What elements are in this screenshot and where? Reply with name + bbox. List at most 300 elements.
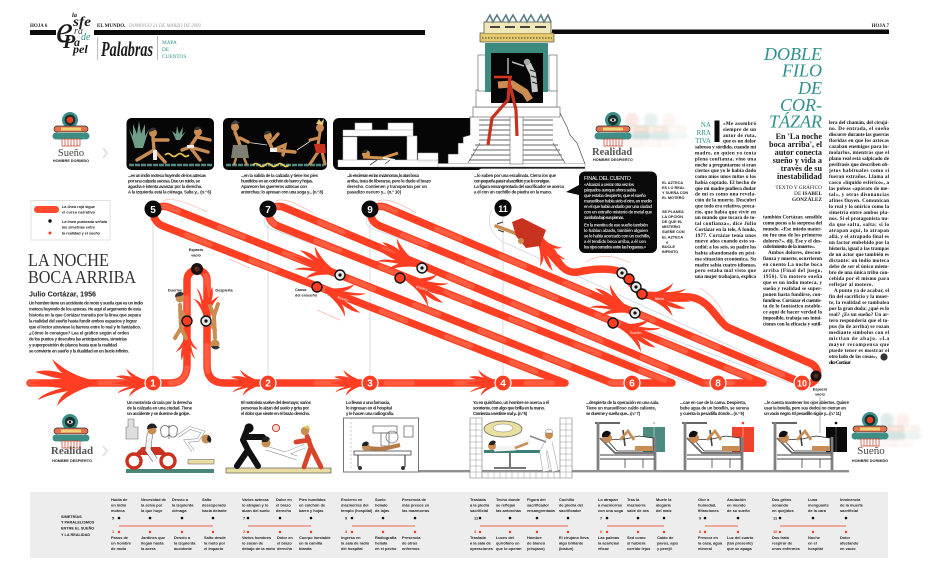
captions for the dream panels: agacha e intenta avanzar por la derecha. bbox=[128, 184, 202, 189]
article text column 3: dictante: un indio moteca bbox=[829, 258, 889, 264]
symmetry group 11 and 4: a la piedra bbox=[470, 502, 490, 508]
callout: final del cuento: a él tendido boca arriba, a él con bbox=[584, 239, 646, 244]
symmetry group 11 and 4: que lo operan bbox=[496, 546, 522, 551]
captions for the dream panels: a él con un cuchillo de piedra en la mano. bbox=[474, 190, 552, 194]
symmetry group 5 and 1: Necesidad de bbox=[141, 497, 167, 502]
dream sequence number markers: 7 bbox=[265, 205, 271, 216]
symmetry group 5 and 1: Pasos de bbox=[111, 535, 129, 540]
symmetry group 11 and 4: algo brillante bbox=[559, 540, 584, 546]
symmetry group 5 and 1: Desvío a bbox=[172, 497, 189, 502]
sidebar note: bucle infinito: EL AZTECA bbox=[662, 181, 683, 185]
panel 3: prison, black scene bbox=[333, 118, 483, 170]
symmetry group 5 and 1: un indio bbox=[111, 502, 127, 508]
symmetry group 7 and 6: Sed como bbox=[627, 535, 646, 540]
article text column 3: cazaban enemigos para in- bbox=[829, 144, 889, 150]
captions for the reality scenes: Un motorista circula por la derecha bbox=[127, 400, 193, 405]
symmetry band label: Y PARALELISMOS bbox=[61, 521, 95, 525]
article subheading: En 'La noche bbox=[776, 132, 822, 141]
article drop label: narrativa: NA bbox=[701, 121, 711, 129]
symmetry group 5 and 1: un hombre bbox=[111, 540, 132, 546]
captions for the reality scenes: lo ingresan en el hospital bbox=[346, 406, 392, 411]
symmetry group 5 and 1: moteca bbox=[111, 508, 125, 513]
labels on flames bbox=[337, 285, 665, 335]
article text column 1: como míos unos mitos o los bbox=[695, 174, 756, 180]
article text column 2: no fue uno de los primeros bbox=[763, 232, 822, 238]
callout: final del cuento: FINAL DEL CUENTO bbox=[584, 176, 631, 182]
emblem: sueno, sleeping man with ghost echoes: HOMBRE DORMIDO bbox=[852, 459, 888, 463]
intro text: se convierte en sueño y la dualidad en un bucle infinito. bbox=[29, 348, 129, 354]
symmetry group 11 and 4: Traslada bbox=[470, 497, 487, 502]
numbers on reality markers: 1 bbox=[150, 379, 156, 390]
symmetry group 7 and 6: mazmorra bbox=[627, 502, 646, 508]
symmetry group 7 and 2: barro y hojas bbox=[299, 508, 323, 513]
symmetry group 7 and 6: la acarician bbox=[598, 540, 620, 546]
sleeper figures on loop: duerme, despierta bbox=[175, 292, 220, 349]
symmetry group 9 and 3: la sala de radio bbox=[341, 540, 370, 546]
article text column 1: había abandonado en pési- bbox=[695, 250, 756, 256]
symmetry group 9 and 8: de su sueño bbox=[727, 508, 750, 513]
article text column 1: tal confianza», dice Julio bbox=[695, 221, 756, 227]
emblem: realidad, awake man with ghost echoes: Realidad bbox=[592, 147, 632, 158]
symmetry group 11 and 10: Luna bbox=[808, 497, 818, 502]
sidebar note: bucle infinito: BUCLE bbox=[662, 245, 676, 249]
article text column 3: discurre durante las guerras bbox=[829, 132, 889, 138]
captions for the dream panels: arriba, trata de liberarse, pero le duele el brazo bbox=[347, 178, 431, 184]
article byline: DE ISABEL bbox=[794, 191, 822, 197]
symmetry band label: ENTRE EL SUEÑO bbox=[61, 526, 94, 530]
article text column 3: real? ¿Es un sueño? Un ar- bbox=[829, 312, 889, 318]
article text column 2: mundo. «Ese miedo mater- bbox=[763, 226, 822, 232]
legend: el curso narrativo bbox=[62, 210, 96, 214]
sidebar note: bucle infinito: LA OPCIÓN bbox=[662, 214, 683, 219]
symmetry group 11 and 10: afectando bbox=[840, 540, 859, 546]
emblem: realidad, awake man: Realidad bbox=[51, 445, 93, 457]
article text column 1: que todo era relativo, preca- bbox=[695, 203, 756, 209]
symmetry group 11 and 4: 11 bbox=[474, 516, 479, 520]
article drop label: narrativa: TIVA bbox=[695, 137, 711, 145]
symmetry group 11 and 10: sacrificial bbox=[840, 508, 858, 513]
article text column 1: pero estaba mal visto que bbox=[695, 268, 757, 274]
node labels bbox=[168, 248, 828, 396]
article text column 1: Cortázar en la tele, A fondo, bbox=[695, 227, 757, 233]
reality sequence number markers bbox=[145, 375, 810, 391]
symmetry group 11 and 4: (bisturí) bbox=[559, 546, 574, 551]
numbers on reality markers bbox=[150, 379, 807, 390]
sidebar note: bucle infinito: INFINITO bbox=[662, 250, 678, 254]
intro text: y superposición de planos hasta que la realidad bbox=[29, 342, 117, 348]
article text column 3: otro lado de las cosas», bbox=[829, 354, 878, 360]
article text column 1: que mi madre pudiera dudar bbox=[695, 186, 757, 192]
symmetry group 11 and 4: Cuchillo bbox=[559, 497, 575, 502]
symmetry group 9 and 3: las mazmorras bbox=[402, 508, 429, 513]
symmetry group 11 and 4 bbox=[470, 497, 589, 551]
article heading: DE bbox=[797, 78, 822, 98]
captions for the reality scenes: Ya en quirófano, un hombre se acerca a él bbox=[473, 400, 549, 405]
symmetry group 5 and 1: hacia delante bbox=[202, 508, 227, 513]
captions for the reality scenes: El motorista vuelve del desmayo; varios bbox=[241, 400, 312, 405]
article text column 2: Ambos dolores, descon- bbox=[768, 250, 822, 256]
article heading: TÁZAR bbox=[769, 110, 822, 132]
symmetry group 11 and 4: se reflejan bbox=[496, 502, 516, 508]
symmetry group 11 and 4: de piedra del bbox=[559, 502, 583, 508]
intro text: Un hombre tiene un accidente de moto y sueña que es un indio bbox=[29, 300, 143, 306]
numbers on reality markers: 4 bbox=[500, 379, 506, 390]
node labels: Despierta bbox=[215, 288, 234, 292]
symmetry group 11 and 4: Figura del bbox=[527, 497, 546, 502]
symmetry group 7 and 6: Tras la bbox=[627, 497, 640, 502]
symmetry group 9 and 3: Encierro en bbox=[341, 497, 363, 502]
symmetry group 5 and 1: accidente bbox=[174, 546, 193, 551]
logo: la esfera de papel: P bbox=[62, 31, 76, 53]
captions for the reality scenes: usar la botella, pero sus dedos no cierran en bbox=[764, 406, 846, 411]
captions for the reality scenes: personas lo alzan del suelo y grita por bbox=[241, 406, 309, 411]
node labels: vacío bbox=[191, 254, 202, 258]
captions for the reality scenes: Lo llevan a una farmacia, bbox=[346, 400, 390, 405]
intro text bbox=[29, 300, 143, 354]
legend bbox=[31, 200, 110, 240]
symmetry group 9 and 3: más presos en bbox=[402, 502, 430, 508]
symmetry group 7 and 6: del matz bbox=[656, 508, 672, 513]
symmetry group 11 and 10: 11 bbox=[773, 516, 778, 520]
symmetry group 11 and 10: en quejidos bbox=[772, 508, 794, 513]
symmetry band background bbox=[30, 492, 888, 558]
symmetry group 7 and 6: Las palmas bbox=[598, 535, 619, 540]
symmetry group 11 and 4: Hombre bbox=[527, 535, 543, 540]
article text column 3: mediante símbolos con el bbox=[829, 330, 890, 336]
callout: final del cuento: se le había acercado con un cuchillo, bbox=[584, 234, 650, 238]
callout: final del cuento bbox=[566, 172, 657, 253]
article text column 3: perífrasis que describen ob- bbox=[829, 162, 889, 168]
article text column 3: puede tener es mostrar el bbox=[829, 348, 890, 354]
article text column 3: no. De entrada, el sueño bbox=[829, 126, 889, 132]
article text column 3: fin del sacrificio y la muer- bbox=[829, 294, 889, 300]
article text column 3: historia, igual a las trampas bbox=[829, 246, 889, 252]
article text column 3: bro de una única tribu con- bbox=[829, 270, 889, 276]
symmetry group 11 and 10 bbox=[772, 497, 864, 551]
symmetry group 9 and 8: Anulación bbox=[727, 497, 746, 502]
captions for the dream panels: con pequeña para ir al sacrificio y se le consigue. bbox=[474, 178, 550, 184]
article byline bbox=[775, 183, 822, 203]
article text column 3: molarlos, mientras que el bbox=[829, 150, 890, 156]
symmetry group 11 and 4: sacrificial bbox=[470, 508, 488, 513]
symmetry group 11 and 4: Traslada bbox=[470, 535, 487, 540]
section header: palabras, mapa de cuentos: CUENTOS bbox=[162, 54, 186, 60]
emblem: sueno, sleeping man: HOMBRE DORMIDO bbox=[53, 159, 89, 163]
article text column 2: como pocos a la sorpresa del bbox=[763, 220, 823, 226]
article text column 2: ponen hasta fundirse, con- bbox=[763, 292, 822, 298]
article text column 3: las poleas «aparato de me- bbox=[829, 186, 889, 192]
captions for the dream panels bbox=[128, 173, 565, 194]
symmetry group 11 and 4: 4 bbox=[474, 529, 477, 534]
symmetry group 7 and 2: el brazo bbox=[277, 540, 292, 546]
symmetry group 9 and 3: de otros bbox=[402, 540, 417, 546]
symmetry group 9 and 8: filtraciones bbox=[698, 508, 719, 513]
symmetry group 9 and 3: 3 bbox=[345, 529, 348, 534]
sidebar note: bucle infinito: Y SUEÑA CON bbox=[662, 190, 688, 195]
main title: BOCA ARRIBA bbox=[28, 267, 136, 287]
captions for the reality scenes: ...le cuesta mantener los ojos abiertos. Quiere bbox=[764, 400, 850, 405]
logo: la esfera de papel bbox=[56, 9, 94, 56]
labels on flames: Piedra bbox=[416, 285, 429, 292]
legend: la realidad y el sueño bbox=[62, 232, 101, 236]
emblem: realidad, awake man with ghost echoes bbox=[592, 112, 688, 162]
article text column 3: afines fluyen. Comunican bbox=[829, 198, 889, 204]
captions for the reality scenes: Comienza a sentirse mal y... (n.º 5) bbox=[473, 411, 528, 416]
article text column 3: de un actor que también es bbox=[829, 252, 889, 258]
symmetry group 9 and 3: Ingresa en bbox=[341, 535, 361, 540]
symmetry group 7 and 2: el brazo bbox=[276, 502, 291, 508]
article text column 2: ciones con la eficacia y sutil- bbox=[763, 322, 822, 328]
sidebar note: bucle infinito: ES LO REAL bbox=[662, 186, 685, 190]
dream sequence number markers: 9 bbox=[367, 205, 373, 216]
symmetry group 9 and 3: en el pecho bbox=[375, 546, 397, 551]
logo: la esfera de papel: la bbox=[72, 12, 78, 19]
captions for the reality scenes: un vacío negro. El pesadillo sigue y... (n.º 11) bbox=[764, 411, 842, 416]
callout: final del cuento: con un extraño misterio de metal que bbox=[584, 210, 653, 214]
header: left page bar: HOJA 6 bbox=[30, 24, 48, 29]
captions for the reality scenes: ...cae en cae de la cama. Despierta, bbox=[680, 400, 746, 405]
article text column 1: plena confianza, vino una bbox=[695, 156, 756, 162]
article text column 1: ma situación económica. Su bbox=[695, 256, 756, 262]
article heading bbox=[763, 44, 822, 132]
symmetry group 7 and 2: 2 bbox=[243, 529, 246, 534]
symmetry group 5 and 1: la acera bbox=[141, 546, 156, 551]
symmetry group 11 and 4: El cirujano lleva bbox=[559, 535, 589, 540]
article text column 2: fundirse. Cortázar el cuentis- bbox=[763, 298, 822, 304]
symmetry group 11 and 4: de blanco bbox=[527, 540, 546, 546]
article text column 3: A punto ya de acabar, el bbox=[834, 288, 890, 294]
captions for the dream panels: ...en la salida de la calzada y tiene los pies bbox=[241, 173, 319, 178]
article text column 3: tero respondería que el to- bbox=[829, 318, 889, 324]
article text column 1: ciertos que yo le había dado bbox=[695, 168, 756, 174]
logo: la esfera de papel: sfe bbox=[72, 15, 91, 30]
symmetry group 9 and 3: de lajas bbox=[375, 508, 389, 513]
scene 4: operating room bbox=[470, 418, 572, 478]
captions for the reality scenes: y le hacen una radiografía. bbox=[346, 411, 394, 416]
callout: final del cuento: zumbaba bajo sus piernas. bbox=[584, 215, 624, 220]
article text column 1: un mundo que tocara de to- bbox=[695, 215, 756, 221]
logo: la esfera de papel: pel bbox=[72, 42, 88, 56]
symmetry group 9 and 3: del hospital bbox=[341, 546, 363, 551]
article text column 1: de mí es como una revela- bbox=[695, 192, 756, 198]
symmetry group 11 and 4: sacrificador bbox=[559, 508, 582, 513]
captions for the dream panels: ...lo encierran en las mazmorras, lo atan boca bbox=[347, 173, 420, 178]
symmetry group 5 and 1: llegan hasta bbox=[141, 540, 164, 546]
symmetry group 9 and 3: Presencia de bbox=[402, 497, 427, 502]
section header: palabras, mapa de cuentos: DE bbox=[162, 47, 169, 53]
symmetry group 9 and 8: Frescor en bbox=[698, 535, 719, 540]
symmetry group 11 and 10: sonando bbox=[772, 502, 789, 508]
symmetry group 5 and 1 bbox=[111, 497, 227, 551]
symmetry group 9 and 3: Radiografía bbox=[375, 535, 397, 540]
article text column 1: nueve años cuando esto su- bbox=[695, 239, 756, 245]
emblem: realidad, awake man: HOMBRE DESPIERTO bbox=[52, 459, 92, 463]
sidebar note: bucle infinito: EL AZTECA bbox=[662, 236, 683, 240]
symmetry group 7 and 6: sabe de ora bbox=[627, 508, 649, 513]
symmetry group 7 and 6: 7 bbox=[600, 516, 602, 520]
labels on flames: Sueño bbox=[337, 295, 350, 303]
article text column 3: floridas en que los aztecas bbox=[829, 138, 889, 144]
article text column 2: dolores?». dij. Ése y el des- bbox=[763, 236, 822, 244]
scene 1: motorcycle accident bbox=[126, 419, 214, 473]
article text column 3: cebida por él mismo para bbox=[829, 276, 889, 282]
illustration: temple pyramid with sacrifice bbox=[335, 15, 585, 169]
callout: final del cuento: En la mentira de ese sueño también bbox=[584, 222, 648, 228]
article text column 1: rio, que había que vivir en bbox=[695, 209, 756, 215]
symmetry group 7 and 2: en la camilla bbox=[299, 540, 323, 546]
article text column 1: ción de la muerte. Descubrí bbox=[695, 198, 757, 204]
author line: Julio Cortázar, 1956 bbox=[29, 290, 96, 298]
article text column 2: arriba (Final del juego, bbox=[763, 267, 823, 274]
symmetry group 11 and 10: Dolor bbox=[840, 535, 851, 540]
symmetry group 11 and 4: operaciones bbox=[470, 546, 493, 551]
symmetry group 7 and 2: derecho bbox=[277, 546, 293, 551]
symmetry group 11 and 10: en vacío bbox=[840, 546, 856, 551]
article text column 1: 1977. Cortázar tenía unos bbox=[695, 233, 756, 239]
symmetry group 7 and 6: Caldo de bbox=[657, 535, 674, 540]
symmetry group 5 and 1: 1 bbox=[112, 529, 115, 534]
symmetry group 5 and 1: ciénaga bbox=[172, 508, 187, 513]
symmetry group 11 and 10: Inminencia bbox=[840, 497, 861, 502]
article text column 2: que es un indio moteca, y bbox=[763, 280, 822, 286]
symmetry group 7 and 6: alegaría bbox=[656, 502, 672, 508]
article text column 1: madre, en quien yo tenía bbox=[695, 150, 756, 156]
article byline: TEXTO Y GRÁFICO bbox=[775, 183, 822, 191]
logo: la esfera de papel: e bbox=[56, 9, 73, 51]
symmetry group 7 and 2: derecho bbox=[276, 508, 292, 513]
symmetry band label bbox=[61, 514, 95, 537]
callout: final del cuento: en el que había andado por una ciudad bbox=[584, 204, 652, 209]
symmetry group 7 and 2: 7 bbox=[243, 516, 245, 520]
sidebar note: bucle infinito: o bbox=[666, 240, 669, 244]
symmetry group 11 and 10: menguante bbox=[808, 502, 830, 508]
article subheading: inestabilidad bbox=[777, 172, 822, 181]
symmetry group 7 and 2: lo atrapan y lo bbox=[242, 502, 269, 508]
symmetry group 5 and 1: Huída de bbox=[111, 497, 128, 502]
symmetry group 9 and 8: 8 bbox=[699, 529, 702, 534]
dream sequence number markers: 11 bbox=[498, 204, 508, 214]
symmetry group 7 and 6: pavos, ajos bbox=[657, 540, 678, 546]
emblem: sueno, sleeping man with ghost echoes bbox=[852, 412, 922, 463]
emblem: realidad, awake man bbox=[51, 414, 107, 463]
symmetry group 5 and 1: la selva por bbox=[141, 502, 163, 508]
symmetry group 11 and 4: las antorchas bbox=[496, 508, 521, 513]
article text column 3: dice Cortázar bbox=[829, 360, 852, 366]
scene 8: hospital bed with red door bbox=[682, 422, 754, 470]
article text column 1 bbox=[695, 121, 757, 280]
symmetry group 11 and 10: Dos trata bbox=[772, 535, 790, 540]
node labels: Causa bbox=[295, 288, 307, 292]
panel 1: fleeing through the jungle bbox=[126, 118, 214, 170]
article text column 1: sabroso y sórdido, cuando mi bbox=[695, 145, 757, 151]
article heading: FILO bbox=[781, 60, 822, 80]
captions for the dream panels: ...lo suben por una escalinata. Cierra los que bbox=[474, 173, 557, 178]
symmetry group 11 and 10: Dos gritos bbox=[772, 497, 791, 502]
section header: palabras, mapa de cuentos: MAPA bbox=[162, 40, 177, 46]
sidebar note: bucle infinito: SE PLANEA bbox=[662, 210, 684, 214]
symmetry group 9 and 8 bbox=[698, 497, 754, 551]
article text column 2: ce aquí de hacer verdad lo bbox=[763, 310, 822, 316]
callout: final del cuento: párpados aunque ahora sabía bbox=[584, 188, 637, 192]
symmetry group 7 and 2: lo sacan de bbox=[242, 540, 264, 546]
symmetry group 9 and 8: (tan presente) bbox=[727, 540, 753, 546]
numbers on reality markers: 3 bbox=[367, 379, 373, 390]
article text column 3: reflejar al motero. bbox=[829, 282, 874, 288]
captions for the reality scenes: un accidente y se duerme de golpe. bbox=[127, 411, 190, 416]
article heading: DOBLE bbox=[763, 44, 822, 64]
symmetry group 5 and 1: de moto bbox=[111, 546, 127, 551]
symmetry group 11 and 10: de la muerte bbox=[840, 502, 864, 508]
article text column 3: atrapan aquí, lo atrapan bbox=[829, 228, 889, 234]
logo: la esfera de papel: de bbox=[81, 32, 91, 43]
callout: final del cuento: que estaba despierto, que el sueño bbox=[584, 193, 646, 198]
header: left page bar: DOMINGO 21 DE MARZO DE 2009 bbox=[128, 24, 201, 29]
logo: la esfera de papel: ra bbox=[74, 26, 83, 37]
article text column 3: plano real está salpicado de bbox=[829, 156, 890, 162]
article text column 2: fianza y muerte, ocurrieron bbox=[763, 256, 822, 262]
emblem: sueno, sleeping man bbox=[52, 112, 107, 163]
article text column 2: cubrimiento de la muerte». bbox=[763, 244, 816, 250]
article subheading: través de su bbox=[781, 164, 822, 173]
node labels: Duerme bbox=[168, 288, 182, 292]
intro text: de los puntos y descubra las anticipaciones, simetrías bbox=[29, 336, 128, 342]
intro text: que el lector atraviese la barrera entre lo real y lo fantástico. bbox=[29, 324, 141, 330]
symmetry group 9 and 8: 9 bbox=[699, 516, 702, 520]
symmetry group 7 and 2: blanda bbox=[299, 546, 312, 551]
symmetry group 5 and 1: la moto por bbox=[204, 540, 226, 546]
legend: La línea roja sigue bbox=[62, 205, 95, 209]
article text column 1: había copiado. El hecho de bbox=[695, 180, 757, 186]
node labels: vacío bbox=[815, 392, 826, 396]
article text column 3: fueran extraños. Llama al bbox=[829, 174, 890, 180]
symmetry group 11 and 10: respirar de bbox=[772, 540, 793, 546]
captions for the reality scenes: Tiene un maravilloso caldo caliente, bbox=[586, 406, 656, 411]
symmetry group 7 and 2: Cuerpo inestable bbox=[299, 535, 331, 540]
article text column 3: tal», y otras disonancias bbox=[829, 192, 889, 198]
panel 2: captured by warriors bbox=[223, 118, 327, 170]
article text column 3: mayor recompensa que bbox=[829, 342, 890, 348]
flames along the line bbox=[28, 230, 693, 406]
article text column 2: también Cortázar, sensible bbox=[763, 214, 823, 220]
captions for the dream panels: por una calzada sucesa. Due un ruido, se bbox=[128, 178, 201, 184]
symmetry group 7 and 6: a mazmorras bbox=[598, 502, 622, 508]
captions for the reality scenes: de la calzada en una ciudad. Tiene bbox=[127, 406, 193, 411]
captions for the dream panels: pasadizo oscuro y... (n.º 10) bbox=[347, 190, 402, 194]
scene 6: hospital bed with teal door bbox=[595, 422, 665, 470]
article text column 1: noche a preguntarme si eran bbox=[695, 162, 756, 168]
article text column 1: siempre de un bbox=[723, 127, 756, 133]
header: right page bar bbox=[552, 24, 889, 34]
symmetry group 9 and 3: templo (hospital) bbox=[341, 508, 373, 513]
symmetry nodes bbox=[182, 263, 822, 382]
symmetry group 7 and 2 bbox=[242, 497, 331, 551]
main title: LA NOCHE bbox=[28, 250, 109, 270]
captions for the reality scenes: y cuenta la pesadilla donde... (n.º 9) bbox=[680, 411, 745, 416]
captions for the dream panels: A la izquierda está la ciénaga. Salta y... (n.º 6) bbox=[128, 190, 212, 194]
symmetry group 9 and 3: helado bbox=[375, 502, 388, 508]
symmetry group 5 and 1: Salto desde bbox=[204, 535, 227, 540]
article text column 3: allá, y el atrapado final es bbox=[829, 234, 889, 240]
symmetry group 5 and 1: desesperado bbox=[202, 502, 227, 508]
symmetry group 9 and 3: helada bbox=[375, 540, 388, 546]
article text column 2: ta de lo fantástico estable- bbox=[763, 304, 822, 310]
section header: palabras, mapa de cuentos: Palabras bbox=[100, 37, 153, 61]
article subheading: autor conecta bbox=[775, 148, 822, 157]
symmetry group 11 and 4: quirófano en bbox=[496, 540, 520, 546]
symmetry group 7 and 2: Dolor en bbox=[276, 497, 292, 502]
symmetry group 11 and 4: (cirujano) bbox=[527, 546, 545, 551]
article text column 1: cedió; a los seis, su padre los bbox=[695, 245, 756, 251]
